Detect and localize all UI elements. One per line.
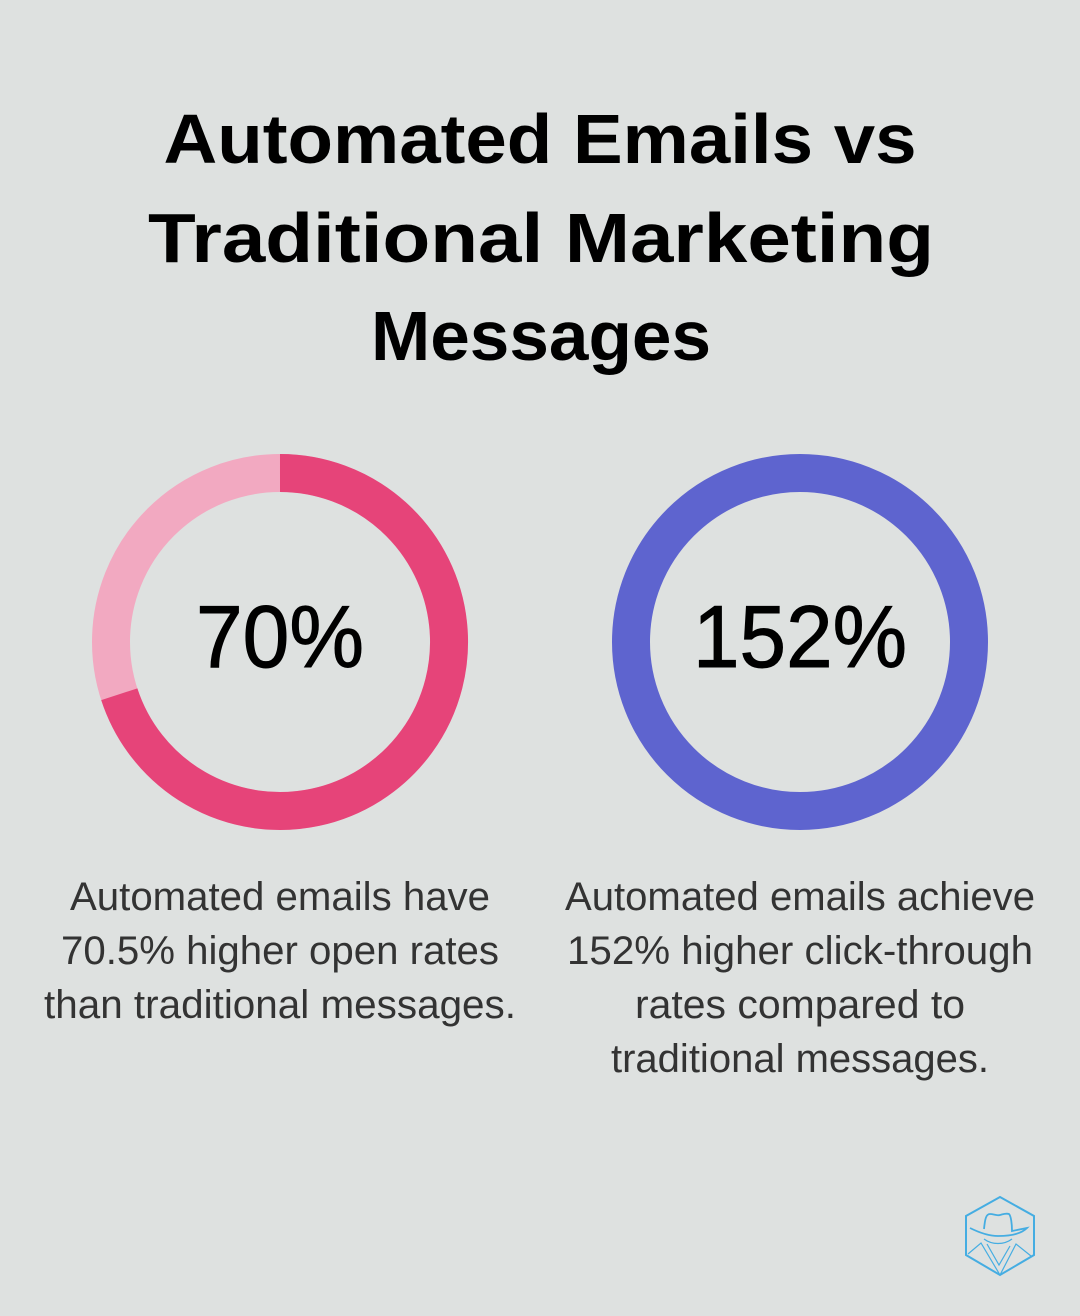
donut chart: 70% bbox=[111, 473, 449, 811]
description: click-through rates: Automated emails achieve bbox=[565, 875, 1035, 919]
description: open rates: Automated emails have bbox=[70, 875, 490, 919]
panel: open rates bbox=[44, 473, 516, 1027]
description: open rates: than traditional messages. bbox=[44, 983, 516, 1027]
description: click-through rates: rates compared to bbox=[635, 983, 965, 1027]
stat: 70%: 70% bbox=[196, 587, 364, 686]
donut chart: 152% bbox=[631, 473, 969, 811]
stat: 152%: 152% bbox=[693, 587, 907, 686]
description: click-through rates bbox=[565, 875, 1035, 1081]
icon: logo, spy in hexagon bbox=[966, 1197, 1034, 1275]
description: open rates: 70.5% higher open rates bbox=[61, 929, 499, 973]
description: open rates bbox=[44, 875, 516, 1027]
title: Traditional Marketing bbox=[148, 199, 934, 277]
description: click-through rates: 152% higher click-through bbox=[567, 929, 1033, 973]
title: Automated Emails vs bbox=[164, 100, 916, 178]
title bbox=[148, 100, 934, 375]
panel: click-through rates bbox=[565, 473, 1035, 1081]
title: Messages bbox=[371, 297, 711, 375]
description: click-through rates: traditional messages. bbox=[611, 1037, 989, 1081]
